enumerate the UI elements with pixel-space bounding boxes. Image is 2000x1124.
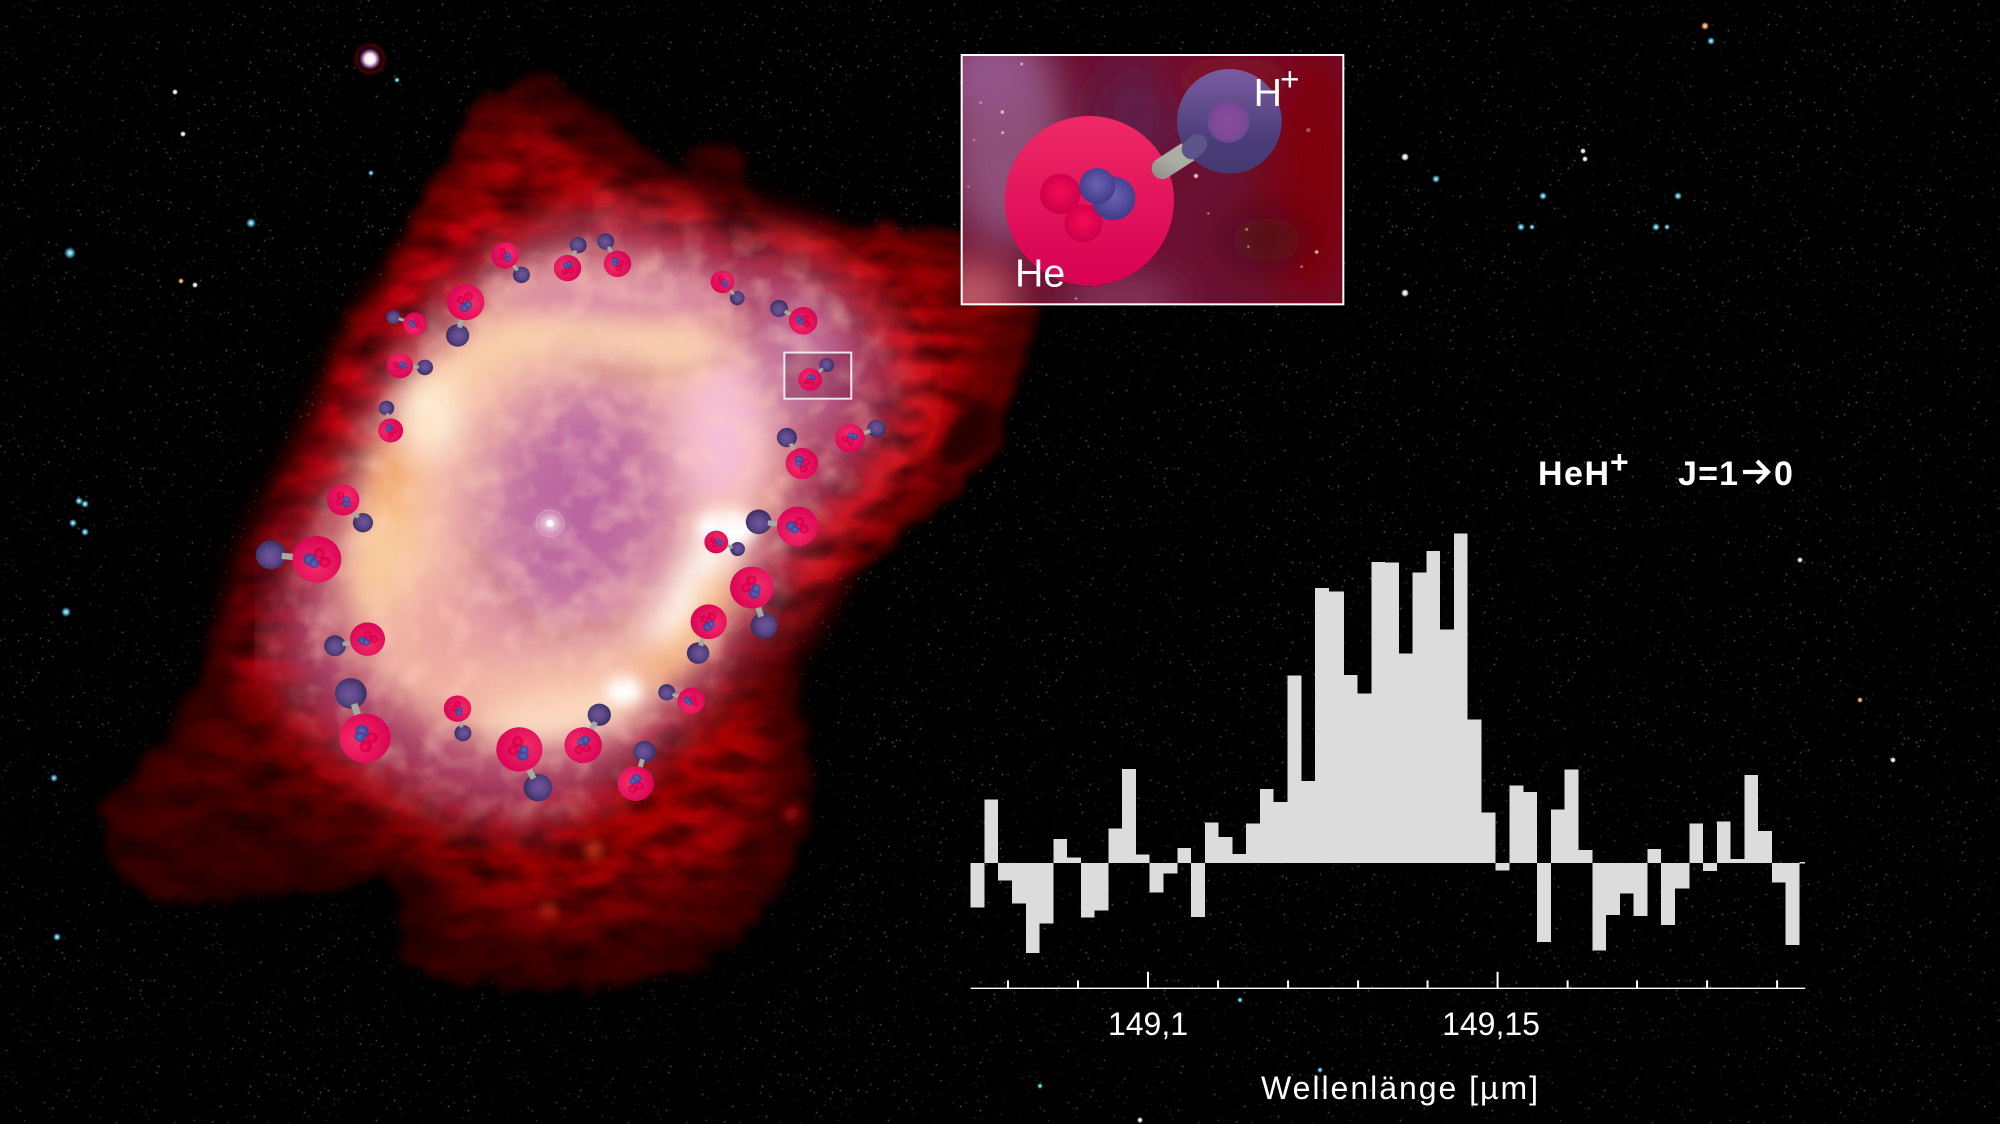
molecule 4 [706, 266, 751, 311]
spectrum heading: 0 [1774, 455, 1793, 493]
nebula: outer red shell [98, 84, 1036, 988]
nebula: darkened fading edges [98, 84, 807, 988]
molecule 6 highlighted [784, 352, 851, 399]
molecule 13 [654, 677, 709, 718]
molecule 15 [558, 697, 621, 769]
label H+: H [1254, 71, 1282, 115]
molecule 21 [320, 478, 382, 540]
molecule 25 [437, 281, 488, 350]
molecule 22 [373, 399, 405, 444]
molecule 1 [486, 237, 537, 290]
nebula with molecules [52, 66, 1044, 1025]
spectrum bars [971, 534, 1805, 953]
axis title: Wellenlänge [µm] [1261, 1070, 1538, 1106]
molecule 7 [831, 412, 891, 457]
molecule 19 [321, 619, 388, 664]
spectrum heading: HeH [1538, 455, 1609, 493]
molecule 8 [768, 422, 824, 485]
label He: He [1015, 252, 1065, 296]
molecule 3 [590, 228, 636, 282]
spectrum heading: J=1 [1678, 455, 1738, 493]
spectrum heading [1538, 444, 1793, 493]
central star [536, 510, 564, 537]
molecule 23 [386, 352, 434, 381]
molecule 17 [441, 693, 478, 744]
molecule 10 [701, 528, 748, 562]
x axis with ticks [971, 972, 1805, 988]
small red blobs in shell [542, 807, 799, 916]
dark hole on right lobe [929, 393, 1006, 476]
inset frame [962, 55, 1343, 304]
axis tick labels: 149,15 [1442, 1006, 1540, 1042]
molecule 20 [253, 530, 344, 585]
spectrum chart [970, 534, 1806, 989]
inset: zoomed HeH+ molecule [960, 54, 1344, 306]
molecule 2 [549, 232, 594, 285]
molecule 18 [322, 672, 397, 769]
molecule 5 [764, 292, 823, 339]
molecule 12 [677, 600, 732, 669]
arrow [1743, 461, 1768, 483]
molecule 14 [613, 737, 665, 805]
label H+: + [1280, 62, 1300, 99]
axis tick labels: 149,1 [1108, 1006, 1188, 1042]
molecule 16 [489, 720, 565, 809]
molecule 11 [725, 561, 789, 644]
axis tick labels [1108, 1006, 1540, 1042]
spectrum heading: + [1610, 444, 1629, 480]
molecule 24 [383, 304, 430, 338]
bright star top left [353, 42, 387, 76]
He atom [1005, 116, 1174, 285]
molecule 9 [743, 501, 820, 548]
H+ atom [1177, 69, 1282, 174]
bond [1162, 148, 1193, 168]
nebula: inner bright body [277, 222, 893, 819]
